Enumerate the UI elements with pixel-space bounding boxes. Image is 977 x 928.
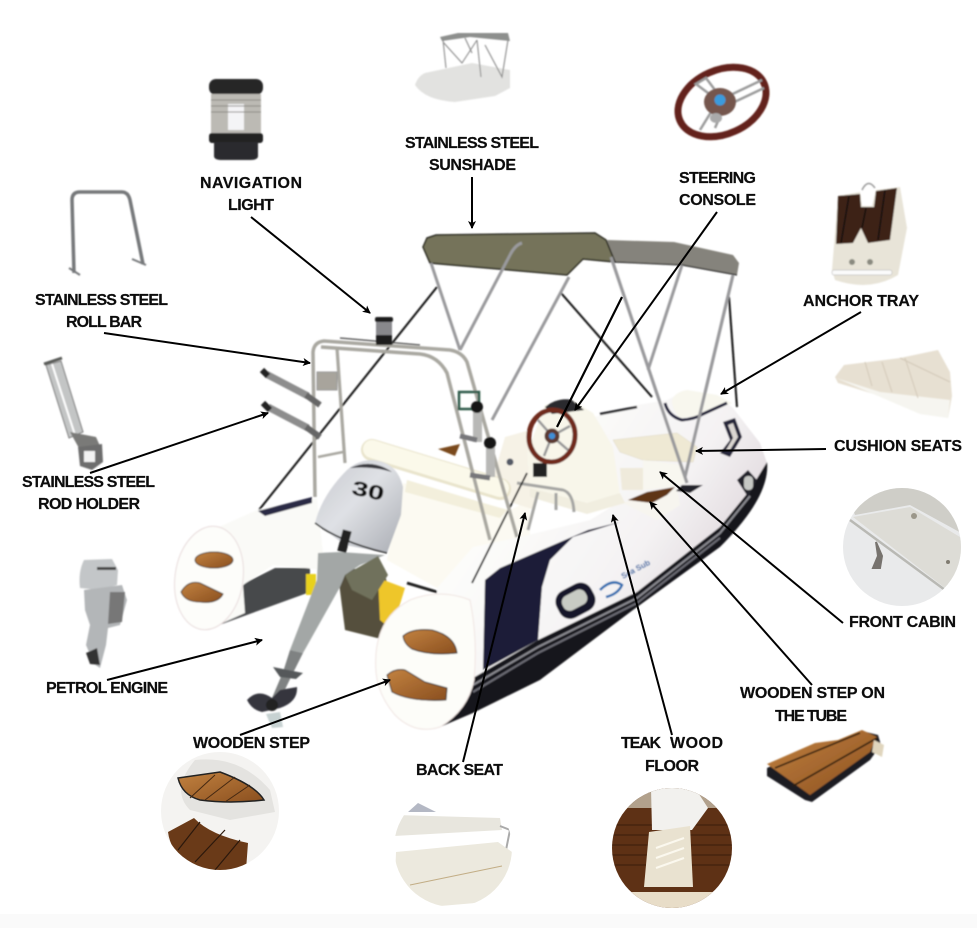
- port tube: [168, 497, 325, 634]
- thumbnail: anchor tray: [832, 183, 907, 285]
- arrows: [90, 177, 861, 762]
- label: navigation light: NAVIGATION: [200, 175, 302, 192]
- arrow: cushion seats: [696, 449, 826, 451]
- starboard hull: [437, 390, 767, 727]
- fishing rod holders on boat: [262, 370, 320, 437]
- label: back seat: BACK SEAT: [416, 762, 503, 779]
- main photo: rigid inflatable boat: [168, 233, 767, 729]
- arrow: sunshade: [471, 177, 473, 228]
- arrow: teak wood floor: [613, 515, 672, 735]
- stern disc with wooden steps: [376, 594, 475, 729]
- navy hull panel: [483, 522, 620, 670]
- label: stainless steel sunshade: SUNSHADE: [429, 157, 516, 174]
- arrow: wooden step: [240, 680, 390, 735]
- stainless steel roll bar: [313, 338, 517, 540]
- label: wooden step on the tube: WOODEN STEP ON: [740, 685, 885, 702]
- thumbnail: steering wheel: [667, 54, 777, 150]
- label: teak wood floor: WOOD: [670, 735, 723, 752]
- label: navigation light: LIGHT: [228, 197, 274, 214]
- rear canopy poles: [431, 243, 682, 420]
- thumbnail: rod holder: [44, 358, 103, 470]
- brand logo: [600, 558, 652, 597]
- thumbnail: cushion seat: [835, 350, 952, 418]
- canopy foot plate: [676, 485, 703, 493]
- label: stainless steel sunshade: STAINLESS STEEL: [405, 135, 539, 152]
- label: stainless steel rod holder: STAINLESS STEEL: [22, 474, 155, 491]
- rubbing strake: [440, 462, 767, 727]
- navigation light on boat: [375, 317, 393, 345]
- teak wood floor: [628, 487, 675, 503]
- side handle: [551, 578, 600, 623]
- brand logo: Sea Sub: [620, 558, 652, 581]
- label: wooden step: WOODEN STEP: [193, 735, 310, 752]
- label: teak wood floor: FLOOR: [645, 758, 699, 775]
- arrow: wooden step on the tube: [650, 502, 812, 685]
- sunshade canopy: [423, 233, 739, 275]
- steering console: [526, 399, 625, 514]
- arrow: front cabin: [660, 472, 843, 623]
- label: stainless steel roll bar: ROLL BAR: [66, 314, 142, 331]
- thumbnail: wooden step on the tube: [767, 730, 884, 802]
- photo circle: back seat: [395, 803, 512, 906]
- photo circle: wooden step: [160, 752, 282, 872]
- label: steering console: CONSOLE: [679, 192, 756, 209]
- photo circle: teak wood floor: [610, 786, 735, 912]
- arrow: anchor tray: [721, 312, 861, 394]
- back seat and transom: [372, 430, 535, 592]
- thumbnail: sunshade on boat: [415, 33, 510, 102]
- label: front cabin: FRONT CABIN: [849, 614, 956, 631]
- background strip: [0, 914, 977, 928]
- label: teak wood floor: TEAK: [621, 735, 661, 752]
- arrow: navigation light: [251, 217, 370, 313]
- outboard engine: [247, 460, 405, 728]
- thumbnail: navigation light: [209, 79, 263, 160]
- line: steering wheel strap: [557, 297, 622, 427]
- roll bar mounted rod holders: [459, 392, 496, 478]
- front canopy poles: [611, 257, 733, 483]
- seat base and front cabin box: [620, 460, 685, 520]
- arrow: back seat: [463, 513, 525, 762]
- photo circle: front cabin: [843, 488, 961, 606]
- arrow: steering console: [575, 212, 717, 410]
- label: petrol engine: PETROL ENGINE: [46, 680, 168, 697]
- label: stainless steel rod holder: ROD HOLDER: [38, 496, 140, 513]
- thumbnail: roll bar: [69, 192, 146, 275]
- strap from rail to tube: [472, 473, 527, 583]
- label: wooden step on the tube: THE TUBE: [775, 708, 847, 725]
- label: anchor tray: ANCHOR TRAY: [803, 293, 919, 310]
- label: steering console: STEERING: [679, 170, 756, 187]
- label: cushion seats: CUSHION SEATS: [834, 438, 962, 455]
- grab rail: [517, 483, 574, 530]
- arrow: rod holder: [90, 413, 268, 473]
- label: stainless steel roll bar: STAINLESS STEEL: [35, 292, 168, 309]
- canopy straps: [259, 287, 737, 510]
- arrow: roll bar: [104, 333, 310, 363]
- arrow: petrol engine: [107, 640, 262, 680]
- bow vents and anchor hatch: [600, 390, 757, 497]
- outboard engine: 30: [350, 477, 386, 505]
- thumbnail: petrol engine: [80, 559, 127, 668]
- cushion seat: [613, 433, 697, 462]
